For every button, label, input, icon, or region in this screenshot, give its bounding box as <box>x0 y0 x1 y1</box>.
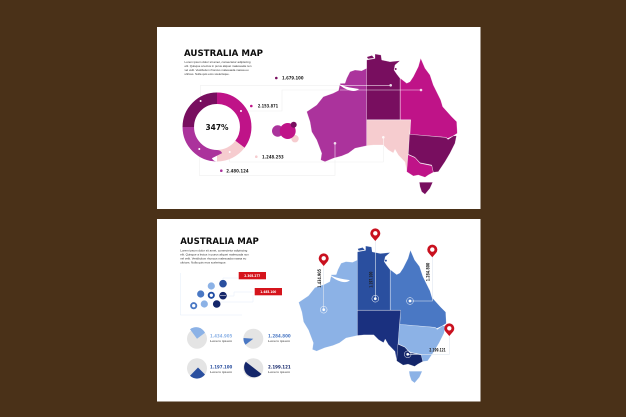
label: 1.248.253: 1.248.253 <box>262 154 284 160</box>
text block: purple panel intro <box>184 60 252 76</box>
rotated label: 1.197.100: 1.197.100 <box>369 272 375 288</box>
Melville island <box>367 56 374 59</box>
bubble cluster <box>272 122 299 142</box>
text block: blue panel intro: ultrices. Nulla quis eros scelerisque. <box>180 260 226 264</box>
label: 2.199.121: 2.199.121 <box>429 348 446 354</box>
label: 1.679.100: 1.679.100 <box>282 76 304 82</box>
map: blue Australia <box>299 246 446 383</box>
red label: 1.485.100 <box>255 288 282 295</box>
label: 1.679.100 <box>275 76 304 82</box>
pin: New South Wales <box>444 323 454 336</box>
connector lines: purple panel <box>199 85 383 175</box>
donut chart <box>188 98 246 156</box>
pie: 2.199.121: 2.199.121 <box>268 364 291 370</box>
panel: blue Australia map <box>157 219 480 402</box>
state: Queensland <box>390 250 446 328</box>
label: 1.248.253 <box>255 154 284 160</box>
pie: 1.434.905 <box>187 327 233 349</box>
text block: purple panel intro: ultrices. Nulla quis eros scelerisque. <box>184 72 230 76</box>
pie: 2.199.121: Lorem ipsum <box>268 370 291 374</box>
pin: Western Australia <box>319 253 329 266</box>
bubble chart <box>180 273 253 315</box>
pie: 1.197.100: 1.197.100 <box>210 364 232 370</box>
state: Victoria <box>407 155 433 177</box>
Groote island <box>395 68 397 70</box>
map: purple Australia <box>307 54 457 194</box>
state: Western Australia <box>307 68 367 162</box>
state: Northern Territory <box>367 54 400 120</box>
red label: 2.305.277 <box>239 272 266 279</box>
state: Tasmania <box>419 182 433 194</box>
title: blue panel: AUSTRALIA MAP <box>180 237 259 247</box>
state: Tasmania <box>409 371 422 383</box>
text block: blue panel intro <box>180 248 249 264</box>
Groote island <box>385 260 387 262</box>
gulf sliver <box>329 275 350 282</box>
text block: purple panel intro: vel velit. Vestibulum rhoncus malesuada massa eu <box>184 68 249 72</box>
pie: 1.197.100: Lorem ipsum <box>210 370 233 374</box>
gulf sliver <box>338 84 359 91</box>
label: 2.153.871: 2.153.871 <box>258 104 278 110</box>
pin: Queensland <box>427 245 437 257</box>
text block: purple panel intro: elit. Quisque a lectus in purus aliquet malesuada non <box>184 64 252 68</box>
red label: 1.485.100: 1.485.100 <box>260 289 277 294</box>
pie: 1.434.905: 1.434.905 <box>210 334 232 340</box>
title: purple panel: AUSTRALIA MAP <box>184 49 263 59</box>
label: 2.153.871 <box>250 104 278 110</box>
pie: 1.197.100 <box>187 358 233 379</box>
rotated label: 1.284.800: 1.284.800 <box>425 263 431 281</box>
pie: 1.284.800: Lorem ipsum <box>268 339 291 343</box>
text block: blue panel intro: elit. Quisque a lectus in purus aliquet malesuada non <box>180 252 249 256</box>
panel: purple Australia map <box>157 27 480 209</box>
text block: blue panel intro: vel velit. Vestibulum rhoncus malesuada massa eu <box>180 256 247 260</box>
text block: purple panel intro: Lorem ipsum dolor sit amet, consectetur adipiscing <box>184 60 251 64</box>
text block: blue panel intro: Lorem ipsum dolor sit amet, consectetur adipiscing <box>180 248 248 252</box>
state: Northern Territory <box>357 246 390 310</box>
pie: 2.199.121 <box>243 358 291 378</box>
state: Western Australia <box>299 260 357 351</box>
state: Victoria <box>397 344 423 366</box>
donut value: 347% <box>206 123 228 132</box>
map connector lines <box>324 240 449 354</box>
red label: 2.305.277: 2.305.277 <box>244 273 261 278</box>
pie: 1.284.800: 1.284.800 <box>268 334 291 340</box>
pie: 1.434.905: Lorem ipsum <box>210 339 233 343</box>
state: South Australia <box>357 310 401 361</box>
map connector lines <box>334 84 422 160</box>
map target markers <box>320 295 413 358</box>
label: 2.480.124 <box>220 168 249 174</box>
pie: 1.284.800 <box>243 329 291 349</box>
label: 2.480.124: 2.480.124 <box>226 168 249 174</box>
state: New South Wales <box>408 134 456 172</box>
Melville island <box>358 247 365 251</box>
state: South Australia <box>367 120 411 172</box>
rotated label: 1.434.905: 1.434.905 <box>317 269 323 288</box>
state: Queensland <box>400 58 457 138</box>
state: New South Wales <box>398 324 445 361</box>
pin: Northern Territory <box>370 228 380 241</box>
